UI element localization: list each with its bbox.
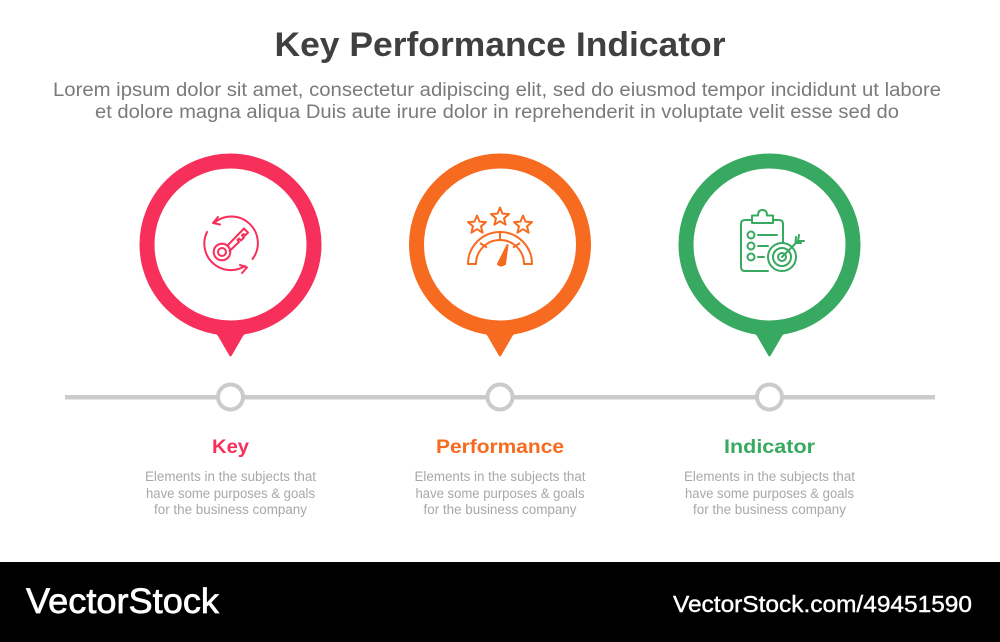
description: key: for the business company xyxy=(154,502,307,517)
icon: gauge with stars xyxy=(468,208,532,266)
description: indicator xyxy=(684,469,855,517)
panel: indicator pin xyxy=(686,161,853,356)
label: performance xyxy=(414,437,586,517)
label: performance: Performance xyxy=(436,437,564,458)
description: performance: Elements in the subjects that xyxy=(414,469,586,484)
footer url: VectorStock.com/49451590 xyxy=(673,591,972,617)
description: key: have some purposes & goals xyxy=(146,486,315,501)
panel: key pin xyxy=(147,161,314,356)
description: key xyxy=(145,469,316,517)
label: key xyxy=(145,437,316,517)
description: indicator: have some purposes & goals xyxy=(685,486,854,501)
description: performance: for the business company xyxy=(424,502,577,517)
panel: performance pin xyxy=(416,161,584,356)
label: key: Key xyxy=(212,437,249,458)
description: performance: have some purposes & goals xyxy=(416,486,585,501)
label: indicator xyxy=(684,437,855,517)
label: indicator: Indicator xyxy=(724,437,816,458)
subtitle paragraph xyxy=(53,80,941,123)
subtitle paragraph: Lorem ipsum dolor sit amet, consectetur adipiscing elit, sed do eiusmod tempor incididunt ut labore xyxy=(53,80,941,101)
description: indicator: for the business company xyxy=(693,502,846,517)
subtitle paragraph: et dolore magna aliqua Duis aute irure dolor in reprehenderit in voluptate velit esse sed do xyxy=(95,102,899,123)
description: performance xyxy=(414,469,586,517)
timeline xyxy=(65,384,935,410)
footer logo text: VectorStock xyxy=(26,582,220,621)
description: key: Elements in the subjects that xyxy=(145,469,316,484)
icon: key with rotating arrows xyxy=(204,217,258,273)
description: indicator: Elements in the subjects that xyxy=(684,469,855,484)
title: Key Performance Indicator xyxy=(274,26,726,64)
icon: clipboard with target xyxy=(741,210,804,271)
footer bar xyxy=(0,562,1000,642)
